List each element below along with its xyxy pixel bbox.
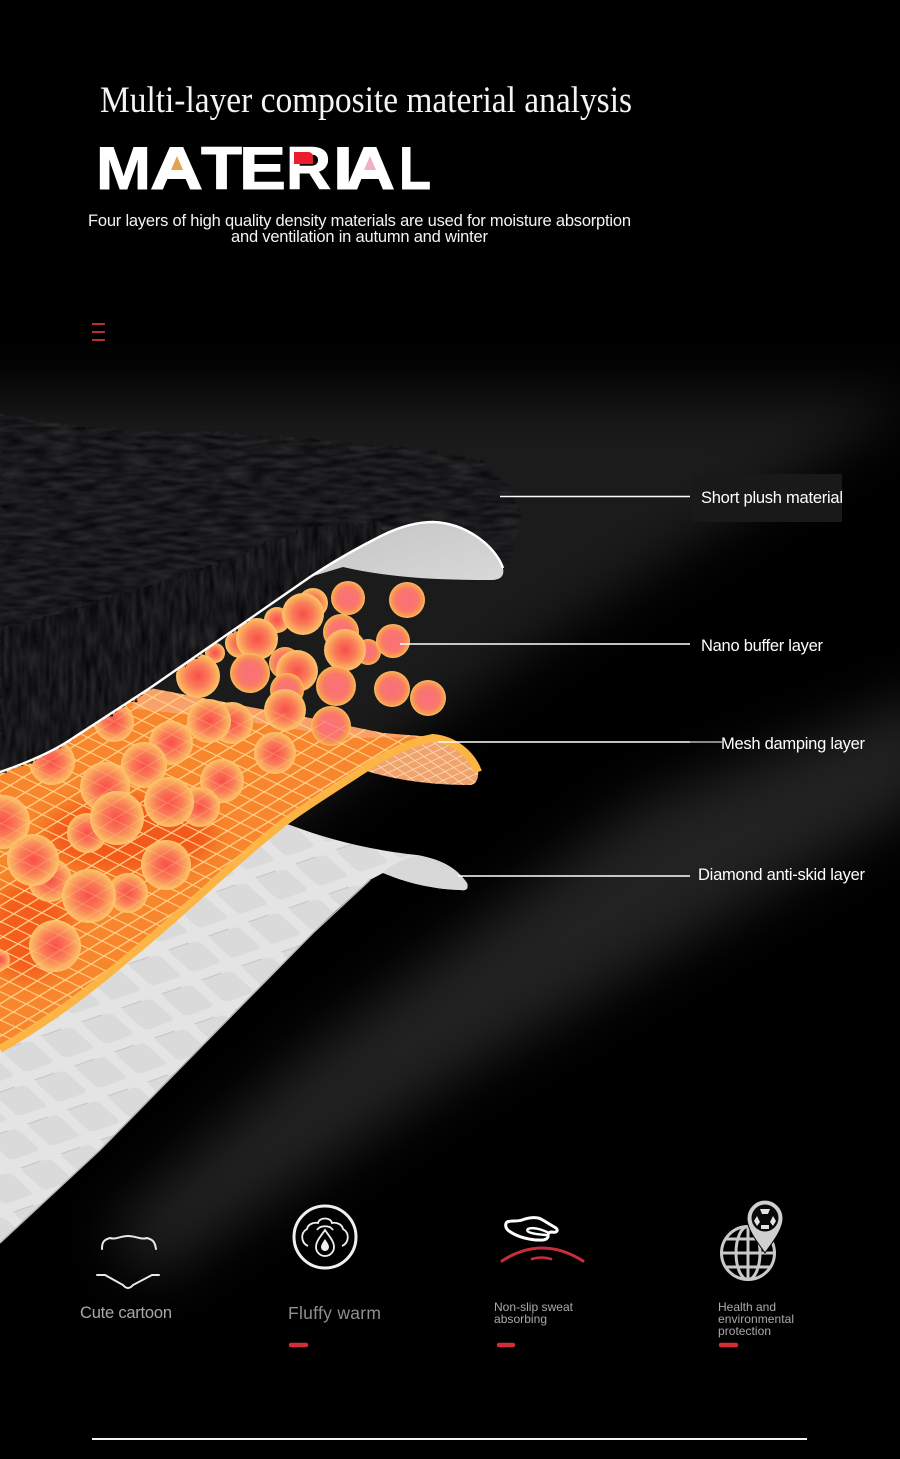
heading: MATERIAL: A [345,135,395,202]
intro text [88,212,631,246]
layer: short plush fur [0,415,520,772]
icon: globe with recycle pin [722,1200,783,1280]
callout: short plush material: Short plush material [701,489,843,507]
icon: hand over surface [502,1218,583,1261]
feature: cute cartoon [80,1236,172,1345]
heading: MATERIAL: L [399,135,431,202]
heading: MATERIAL: M [96,135,151,202]
icon: cat outline [97,1236,159,1288]
layer: diamond anti-skid sheet [0,823,468,1243]
feature: health and environmental protection: Health and [718,1300,776,1314]
callout: mesh damping layer: Mesh damping layer [721,735,866,753]
heading: MATERIAL: I [333,135,353,202]
icon: cloud and droplet in circle [294,1206,356,1268]
feature: non-slip sweat absorbing: Non-slip sweat [494,1300,574,1314]
layer: mesh damping sheet [0,688,482,1052]
callout: nano buffer layer: Nano buffer layer [701,637,824,655]
layer: nano buffer sheet edge [0,522,503,772]
heading: MATERIAL: T [201,135,242,202]
heading: MATERIAL: E [239,135,286,202]
feature: fluffy warm [288,1206,381,1345]
bottom divider [92,1438,807,1440]
feature: cute cartoon: Cute cartoon [80,1304,172,1322]
intro text: Four layers of high quality density materials are used for moisture absorption [88,212,631,230]
feature: health and environmental protection: protection [718,1324,771,1338]
nano buffer particles [0,581,446,1040]
feature: health and environmental protection [718,1200,794,1345]
feature: health and environmental protection: environmental [718,1312,794,1326]
title: Multi-layer composite material analysis [100,80,632,121]
feature: fluffy warm: Fluffy warm [288,1303,381,1323]
heading: MATERIAL: R [286,135,331,202]
heading: MATERIAL: A [150,135,203,202]
layer: mesh sheet back fold [363,737,478,785]
callout: short plush material [500,474,843,522]
callout: diamond anti-skid layer: Diamond anti-skid layer [698,866,866,884]
icon: red menu mark [92,324,105,340]
feature: non-slip sweat absorbing: absorbing [494,1312,547,1326]
heading: MATERIAL [96,135,431,202]
feature: non-slip sweat absorbing [494,1218,583,1345]
intro text: and ventilation in autumn and winter [231,228,488,246]
